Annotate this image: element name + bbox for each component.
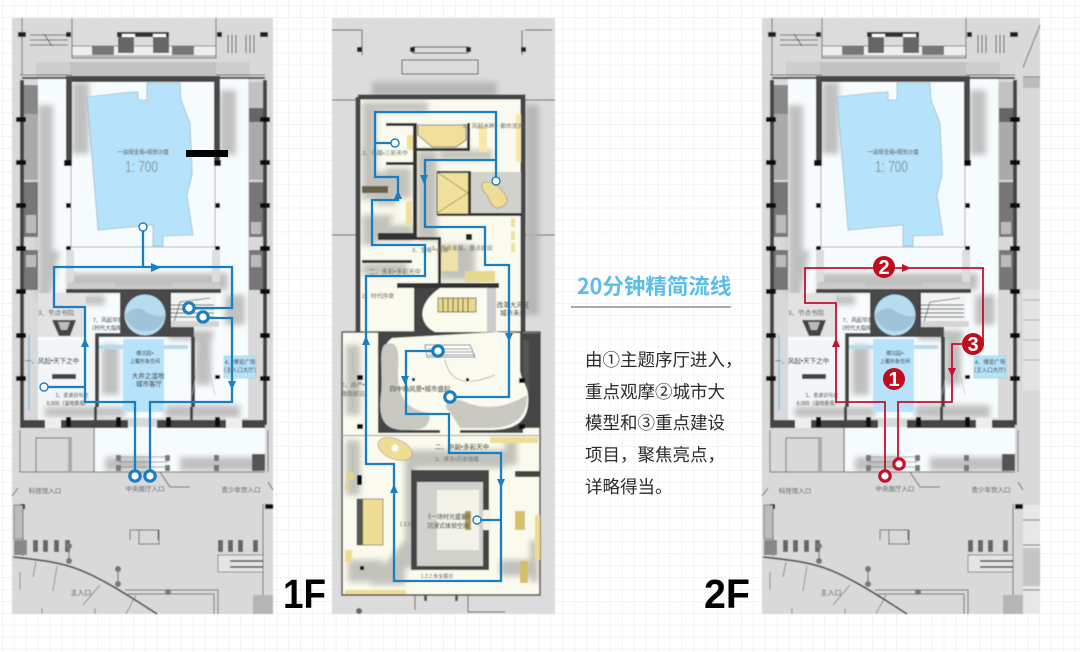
- route markers middle: [391, 139, 500, 524]
- middle plan labels: 城市未来: [500, 308, 526, 317]
- 1F labels: 主入口: [70, 588, 92, 597]
- heading rule: [571, 306, 731, 308]
- 2F labels: 6.000（湿地景观）: [797, 400, 839, 407]
- 1F labels: 青少年宫入口: [222, 485, 260, 494]
- 1F labels: 1、走进识与史: [56, 392, 88, 399]
- route: 1F blue flow line: [47, 230, 232, 472]
- model scale: 1: 700: [125, 159, 158, 176]
- 2F labels: 傅沉园+: [886, 350, 904, 357]
- route markers 2F: [880, 459, 904, 481]
- 1F labels: 上覆形象空间: [130, 358, 160, 365]
- 1F labels: 傅沉园+: [136, 350, 154, 357]
- panel: middle floor plan: [332, 18, 555, 614]
- body text: 模型和③重点建设: [585, 410, 725, 435]
- 2F labels: （时代大指挥）: [839, 324, 877, 332]
- 1F labels: 中央展厅入口: [126, 484, 164, 493]
- 1F labels: （主入口大厅）: [221, 366, 259, 374]
- 2F labels: 主入口: [820, 588, 842, 597]
- middle plan labels: 二、多彩•多彩天中: [369, 268, 421, 276]
- badge 1: 1: [888, 369, 900, 391]
- arrows on middle route: [362, 175, 513, 493]
- 2F labels: 7、风起华章: [843, 316, 874, 324]
- floor plan base 1F: [12, 18, 273, 614]
- middle plan labels: 1.2.3: [399, 522, 411, 528]
- 2F labels: 1: 700: [875, 159, 908, 176]
- 1F labels: 6.000（湿地景观）: [47, 400, 89, 407]
- badge 2: [873, 256, 895, 279]
- 2F labels: 3、节点书院: [788, 308, 825, 317]
- badge 1: [883, 368, 905, 391]
- middle plan labels: 二、中副•多彩天中: [435, 442, 489, 451]
- middle plan labels: 沉浸式体验空间: [427, 522, 469, 530]
- middle plan labels: 1.2.2 余全展示: [421, 573, 453, 580]
- middle plan labels: 四中轴风景•城市盛起: [390, 384, 451, 393]
- 1F labels: 4、博览广场: [225, 358, 256, 366]
- middle plan base: [332, 18, 555, 614]
- 2F labels: 1、走进识与史: [806, 392, 838, 399]
- body text: 重点观摩②城市大: [585, 379, 725, 404]
- middle plan labels: [341, 122, 530, 580]
- panel: 2F floor plan: [762, 18, 1040, 614]
- 1F labels: 3、节点书院: [38, 308, 75, 317]
- route: 2F red flow line: [805, 268, 983, 476]
- middle plan labels: 2、出产•: [341, 381, 365, 389]
- badge 3: 3: [967, 334, 979, 356]
- 1F labels: [25, 148, 260, 597]
- label: 1F: 1F: [283, 571, 326, 617]
- middle plan labels: 2、风起水畔 · 都市流光: [463, 122, 523, 130]
- middle plan labels: 《一场时光盛宴》: [425, 513, 473, 521]
- 2F labels: [775, 148, 1010, 597]
- 1F labels: 大井之湿地: [132, 371, 165, 380]
- middle plan labels: 2、时代序章: [362, 292, 394, 300]
- 1F labels: （时代大指挥）: [89, 324, 127, 332]
- 2F labels: 4、博览广场: [975, 358, 1006, 366]
- middle plan labels: 2、马踏•三彩天中: [362, 149, 408, 157]
- heading: 20分钟精简流线: [577, 270, 731, 301]
- route markers 1F: [40, 223, 208, 481]
- badge 2: 2: [878, 257, 890, 279]
- 1F labels: 科技馆入口: [29, 486, 61, 495]
- 2F labels: 上覆形象空间: [880, 358, 910, 365]
- middle plan labels: 微观前沿: [341, 390, 365, 398]
- floor plan base 2F: [762, 18, 1040, 614]
- model label: 一运规全局•规划沙盘: [117, 148, 169, 156]
- arrows on 2F route: [832, 264, 956, 377]
- middle plan labels: 改革大河区: [497, 300, 530, 309]
- body text: [585, 347, 742, 499]
- body text: 项目，聚焦亮点，: [585, 442, 725, 467]
- middle plan labels: 1、序方•历史线缆: [435, 455, 479, 463]
- badge 3: [962, 333, 984, 356]
- arrows on 1F route: [81, 263, 236, 390]
- 2F labels: （主入口大厅）: [971, 366, 1009, 374]
- black bar: [186, 150, 228, 157]
- middle plan labels: 3、产业发展、重点建设: [431, 244, 493, 252]
- 2F labels: 中央展厅入口: [876, 484, 914, 493]
- panel: 1F floor plan: [12, 18, 273, 614]
- middle plan labels: 3、全域一盘棋: [412, 246, 449, 254]
- panel: description: [571, 270, 742, 499]
- 2F labels: 科技馆入口: [779, 486, 811, 495]
- 2F labels: 一运规全局•规划沙盘: [867, 148, 919, 156]
- 1F labels: 7、风起华章: [93, 316, 124, 324]
- 2F labels: 一、风起•天下之中: [775, 356, 829, 365]
- 1F labels: 一、风起•天下之中: [25, 356, 79, 365]
- body text: 详略得当。: [585, 474, 672, 499]
- 1F labels: · 城市客厅: [132, 379, 162, 388]
- route: middle plan blue flow lines: [366, 112, 509, 581]
- label: 2F: 2F: [704, 571, 750, 617]
- 2F labels: 青少年宫入口: [972, 485, 1010, 494]
- body text: 由①主题序厅进入，: [585, 347, 742, 372]
